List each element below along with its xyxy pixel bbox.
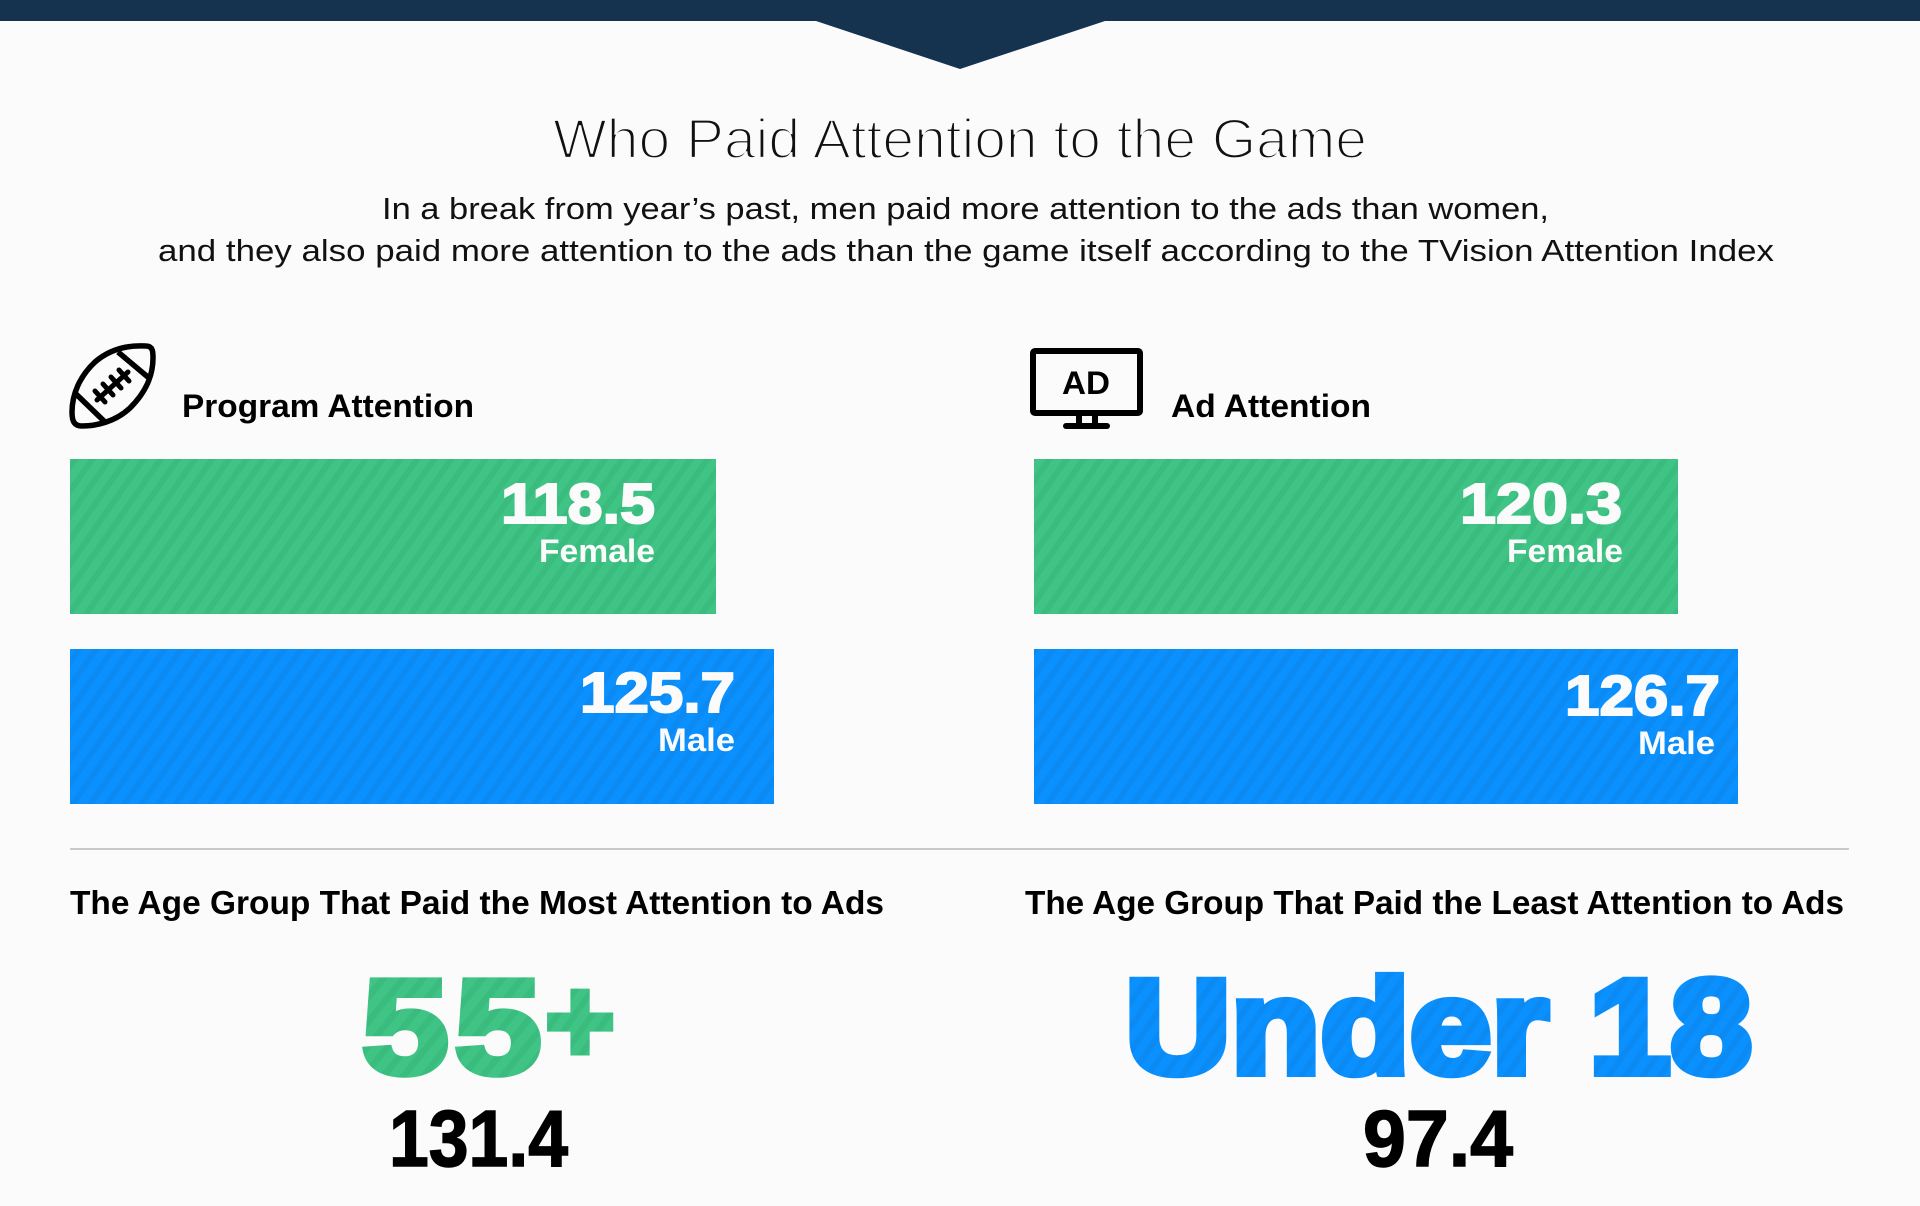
value: 97.4: 97.4 [1363,1094,1513,1183]
heading: program attention: Program Attention [182,388,474,424]
bar: program female: 118.5 [501,472,655,536]
panel: program attention [70,346,774,804]
bar: ad male: 126.7 [1565,664,1720,728]
big label: under 18: Under 18 [1125,953,1752,1102]
panel: ad attention [1033,351,1738,804]
bar: program male: Male [658,722,735,758]
bar: program female: Female [539,533,655,569]
bar: ad female [1034,459,1678,614]
bar: ad male: Male [1638,725,1715,761]
bar: program female [70,459,716,614]
heading: least attention: The Age Group That Paid the Least Attention to Ads [1025,884,1844,921]
icon: tv ad: AD [1062,365,1110,401]
panel: most attentive age group [70,884,884,1183]
heading: most attention: The Age Group That Paid the Most Attention to Ads [70,884,884,921]
header banner with arrow [0,0,1920,69]
big label: 55+: 55 [362,952,541,1102]
subtitle: and they also paid more attention to the ads than the game itself according to the TVision Attention Index [158,233,1775,268]
subtitle [158,191,1775,268]
bar: ad male [1034,649,1738,804]
title: Who Paid Attention to the Game [553,107,1367,170]
heading: ad attention: Ad Attention [1171,388,1371,424]
panel: least attentive age group [1025,884,1844,1183]
bar: ad female: 120.3 [1460,472,1622,536]
value: 131.4: 131.4 [389,1094,568,1183]
bar: program male [70,649,774,804]
icon: football [72,346,153,426]
subtitle: In a break from year’s past, men paid more attention to the ads than women, [382,191,1549,226]
icon: tv ad [1033,351,1140,429]
big label: 55+: + [545,954,615,1088]
bar: program male: 125.7 [580,661,735,725]
bar: ad female: Female [1507,533,1623,569]
